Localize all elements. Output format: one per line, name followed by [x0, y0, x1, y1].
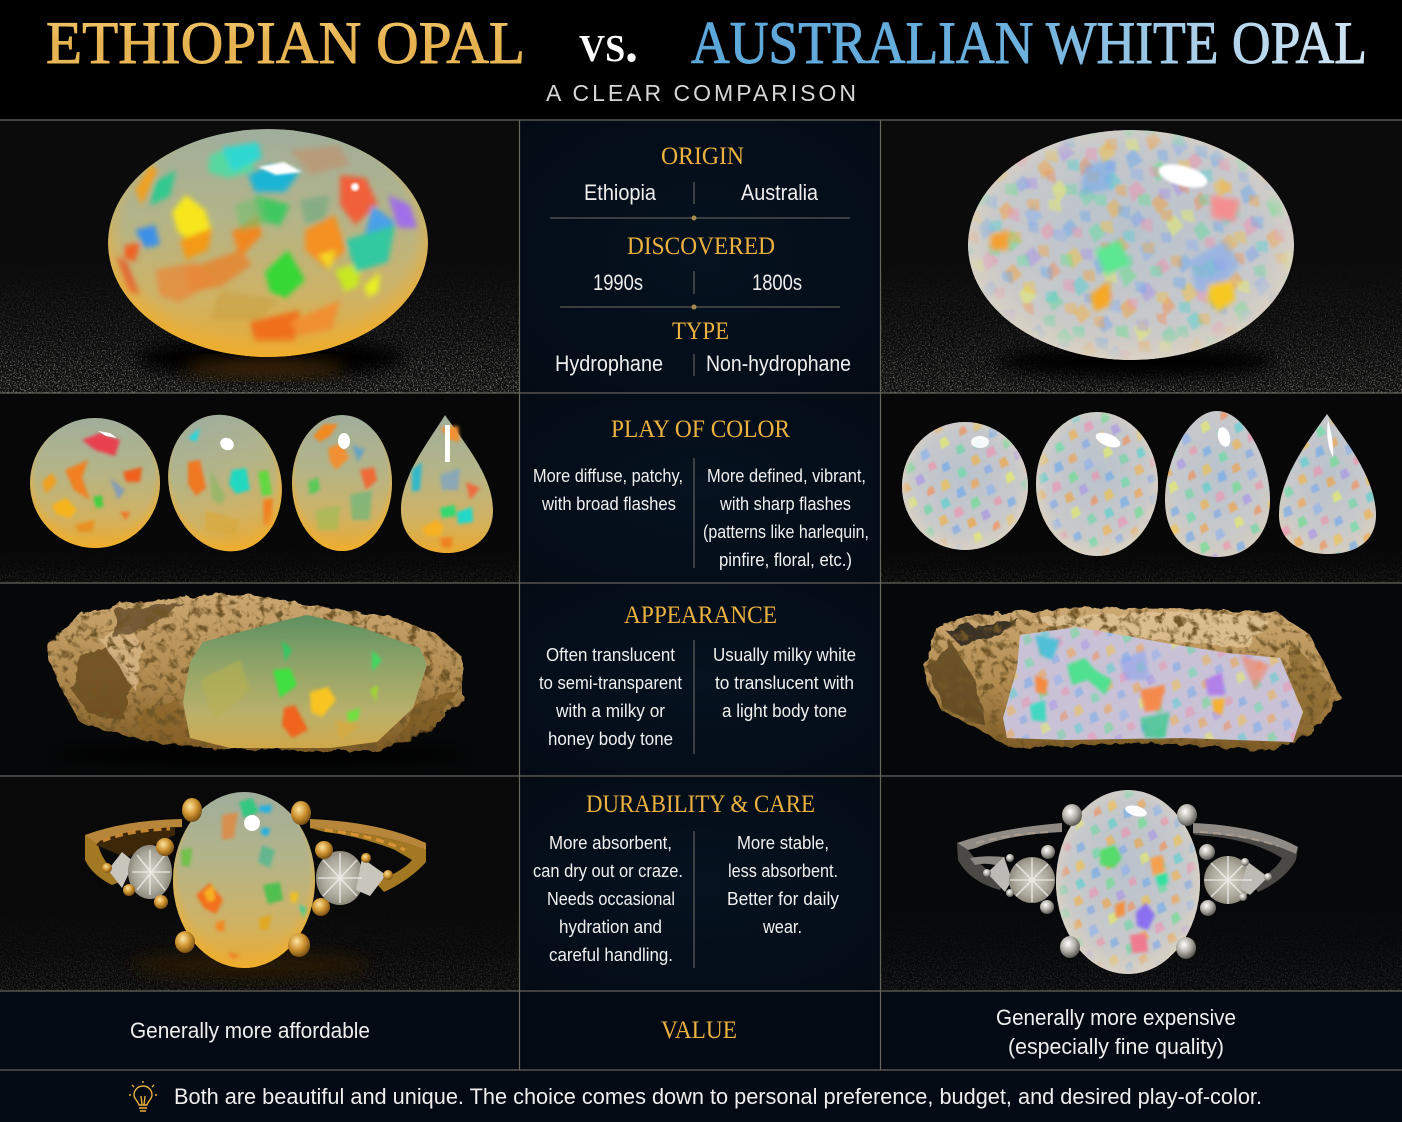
icon: rough Australian opal in matrix: [920, 600, 1345, 755]
panel: left rough Ethiopian opal: [47, 592, 465, 752]
text: Ethiopian play of color: with broad flashes: [541, 493, 676, 514]
icon: silver ring: [957, 790, 1298, 974]
icon: silver prongs: [1060, 804, 1197, 959]
panel: right silver ring with Australian opal: [881, 777, 1402, 991]
icon: right diamonds: [316, 851, 386, 905]
icon: right diamonds: [1204, 856, 1268, 904]
text: Australian appearance: to translucent with: [715, 672, 854, 693]
text: 1990s: 1990s: [593, 270, 643, 295]
text: Australian durability: Better for daily: [727, 888, 840, 909]
text: Ethiopian durability: careful handling.: [549, 944, 673, 965]
text: Australian value: [996, 1005, 1236, 1059]
text: Ethiopia: Ethiopia: [584, 180, 657, 205]
icon: egg white opal: [1165, 411, 1270, 557]
text: Australian play of color: pinfire, floral, etc.): [719, 549, 852, 570]
text: Australian durability: less absorbent.: [728, 860, 838, 881]
heading: durability and care: DURABILITY & CARE: [586, 791, 815, 818]
icon: left diamonds: [108, 845, 172, 899]
heading: type: TYPE: [672, 318, 729, 345]
panel: right four Australian opal cuts: [881, 394, 1402, 583]
panel: right large Australian opal photo: [881, 120, 1402, 393]
panel: left large Ethiopian opal photo: [0, 120, 519, 393]
text: Ethiopian value: Generally more affordable: [130, 1018, 370, 1043]
text: Australian appearance: a light body tone: [722, 700, 847, 721]
text: Australian durability: More stable,: [737, 832, 829, 853]
icon: left diamonds: [987, 857, 1055, 903]
text: Australia: Australia: [741, 180, 819, 205]
heading: origin: ORIGIN: [661, 143, 744, 170]
icon: oval opal stone: [173, 792, 315, 968]
heading: vs.: vs.: [579, 13, 638, 73]
subtitle: A CLEAR COMPARISON: [546, 80, 856, 106]
text: Ethiopian appearance: [539, 644, 682, 749]
text: Australian play of color: with sharp flashes: [719, 493, 851, 514]
panel: value row: [0, 992, 1402, 1070]
text: Australian appearance: [713, 644, 856, 721]
panel: footer note: [0, 1071, 1402, 1122]
icon: tall oval opal: [292, 415, 392, 551]
text: Ethiopian durability: hydration and: [559, 916, 662, 937]
text: Ethiopian appearance: with a milky or: [555, 700, 665, 721]
panel: center play of color: [520, 394, 881, 583]
text: Ethiopian durability: Needs occasional: [547, 888, 675, 909]
text: Ethiopian appearance: Often translucent: [546, 644, 675, 665]
panel: center origin, discovered and type: [520, 120, 881, 393]
icon: teardrop white opal: [1279, 414, 1376, 554]
text: Australian play of color: More defined, vibrant,: [707, 465, 866, 486]
icon: round opal: [30, 418, 160, 548]
text: Australian durability: [727, 832, 840, 937]
text: Australian appearance: Usually milky white: [713, 644, 856, 665]
text: Ethiopian play of color: [533, 465, 683, 514]
text: Hydrophane: Hydrophane: [555, 351, 663, 376]
text: Ethiopian play of color: More diffuse, patchy,: [533, 465, 683, 486]
text: Ethiopian durability: can dry out or craze.: [533, 860, 683, 881]
text: 1800s: 1800s: [752, 270, 802, 295]
text: Ethiopian appearance: to semi-transparent: [539, 672, 682, 693]
icon: large Australian opal gem: [968, 130, 1294, 360]
heading: play of color: PLAY OF COLOR: [611, 416, 790, 443]
heading: appearance: APPEARANCE: [624, 602, 777, 629]
icon: oval white opal stone: [1056, 790, 1200, 974]
icon: gold ring: [85, 792, 426, 968]
panel: left gold ring with Ethiopian opal: [0, 777, 519, 991]
heading: discovered: DISCOVERED: [627, 233, 775, 260]
icon: oval white opal: [1036, 412, 1158, 556]
text: Ethiopian durability: [533, 832, 683, 965]
text: Australian play of color: [703, 465, 869, 570]
panel: center durability and care: [520, 777, 881, 991]
icon: teardrop opal: [401, 415, 493, 553]
text: footer conclusion: Both are beautiful and unique. The choice comes down to personal preference, budget, and desired play-of-color.: [174, 1084, 1262, 1109]
icon: large Ethiopian opal gem: [108, 129, 428, 357]
icon: gold prongs: [175, 798, 311, 957]
icon: rough Ethiopian opal in matrix: [40, 590, 470, 755]
heading: Ethiopian Opal: ETHIOPIAN OPAL: [46, 10, 525, 76]
text: Non-hydrophane: Non-hydrophane: [706, 351, 851, 376]
text: Ethiopian durability: More absorbent,: [549, 832, 672, 853]
panel: center appearance: [520, 584, 881, 776]
heading: value: VALUE: [661, 1017, 737, 1044]
text: Australian durability: wear.: [762, 916, 802, 937]
icon: oval opal: [154, 403, 296, 563]
panel: left four Ethiopian opal cuts: [0, 414, 519, 582]
text: Australian value: (especially fine quality): [1008, 1034, 1224, 1059]
icon: round white opal: [902, 422, 1028, 550]
text: Australian value: Generally more expensive: [996, 1005, 1236, 1030]
text: Australian play of color: (patterns like harlequin,: [703, 521, 869, 542]
panel: right rough Australian opal: [923, 606, 1342, 752]
icon: light bulb: [129, 1081, 157, 1111]
title: [46, 10, 1367, 106]
text: Ethiopian appearance: honey body tone: [548, 728, 673, 749]
